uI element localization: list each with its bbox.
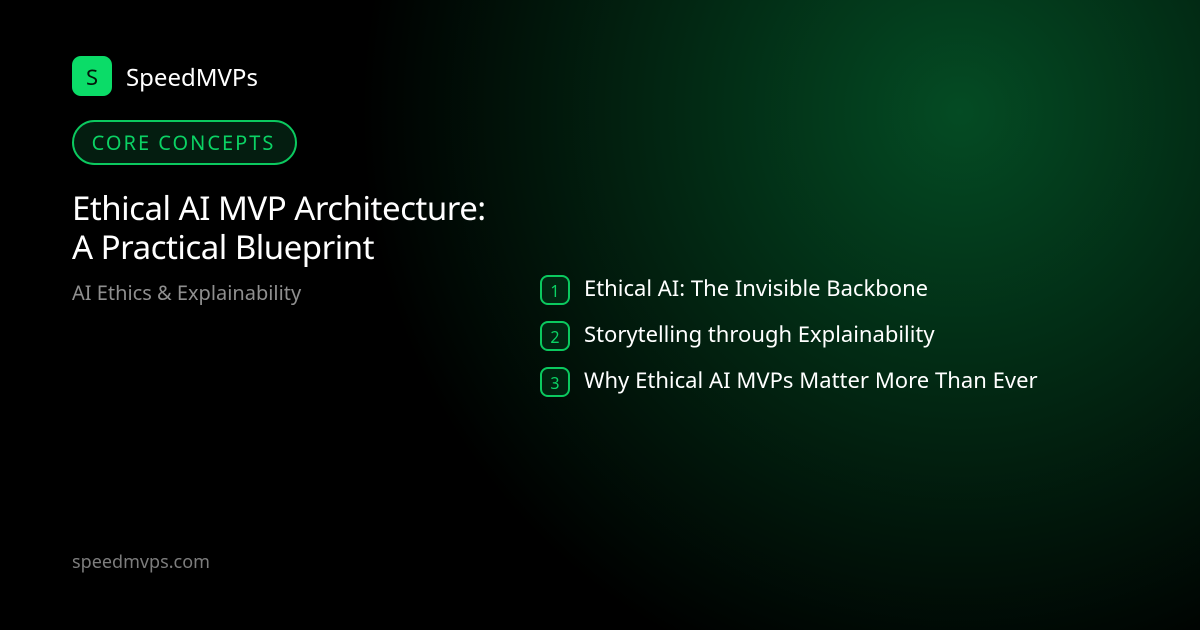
list item 2: Storytelling through Explainability <box>584 319 935 349</box>
badge: core concepts <box>72 120 297 165</box>
number badge 3: 3 <box>550 372 560 394</box>
number badge 2: 2 <box>550 326 560 348</box>
list item 3: Why Ethical AI MVPs Matter More Than Ever <box>584 365 1038 395</box>
badge: core concepts: CORE CONCEPTS <box>92 129 275 156</box>
title: A Practical Blueprint <box>72 224 374 269</box>
number badge 1: 1 <box>550 280 560 302</box>
title <box>72 185 486 269</box>
list item 1: Ethical AI: The Invisible Backbone <box>584 273 928 303</box>
brand name: SpeedMVPs <box>126 61 258 94</box>
logo mark: S <box>86 62 98 92</box>
number badge 3 <box>540 367 570 397</box>
footer url: speedmvps.com <box>72 550 210 574</box>
number badge 1 <box>540 275 570 305</box>
logo mark <box>72 56 112 96</box>
subtitle: AI Ethics & Explainability <box>72 279 301 306</box>
number badge 2 <box>540 321 570 351</box>
title: Ethical AI MVP Architecture: <box>72 185 486 230</box>
